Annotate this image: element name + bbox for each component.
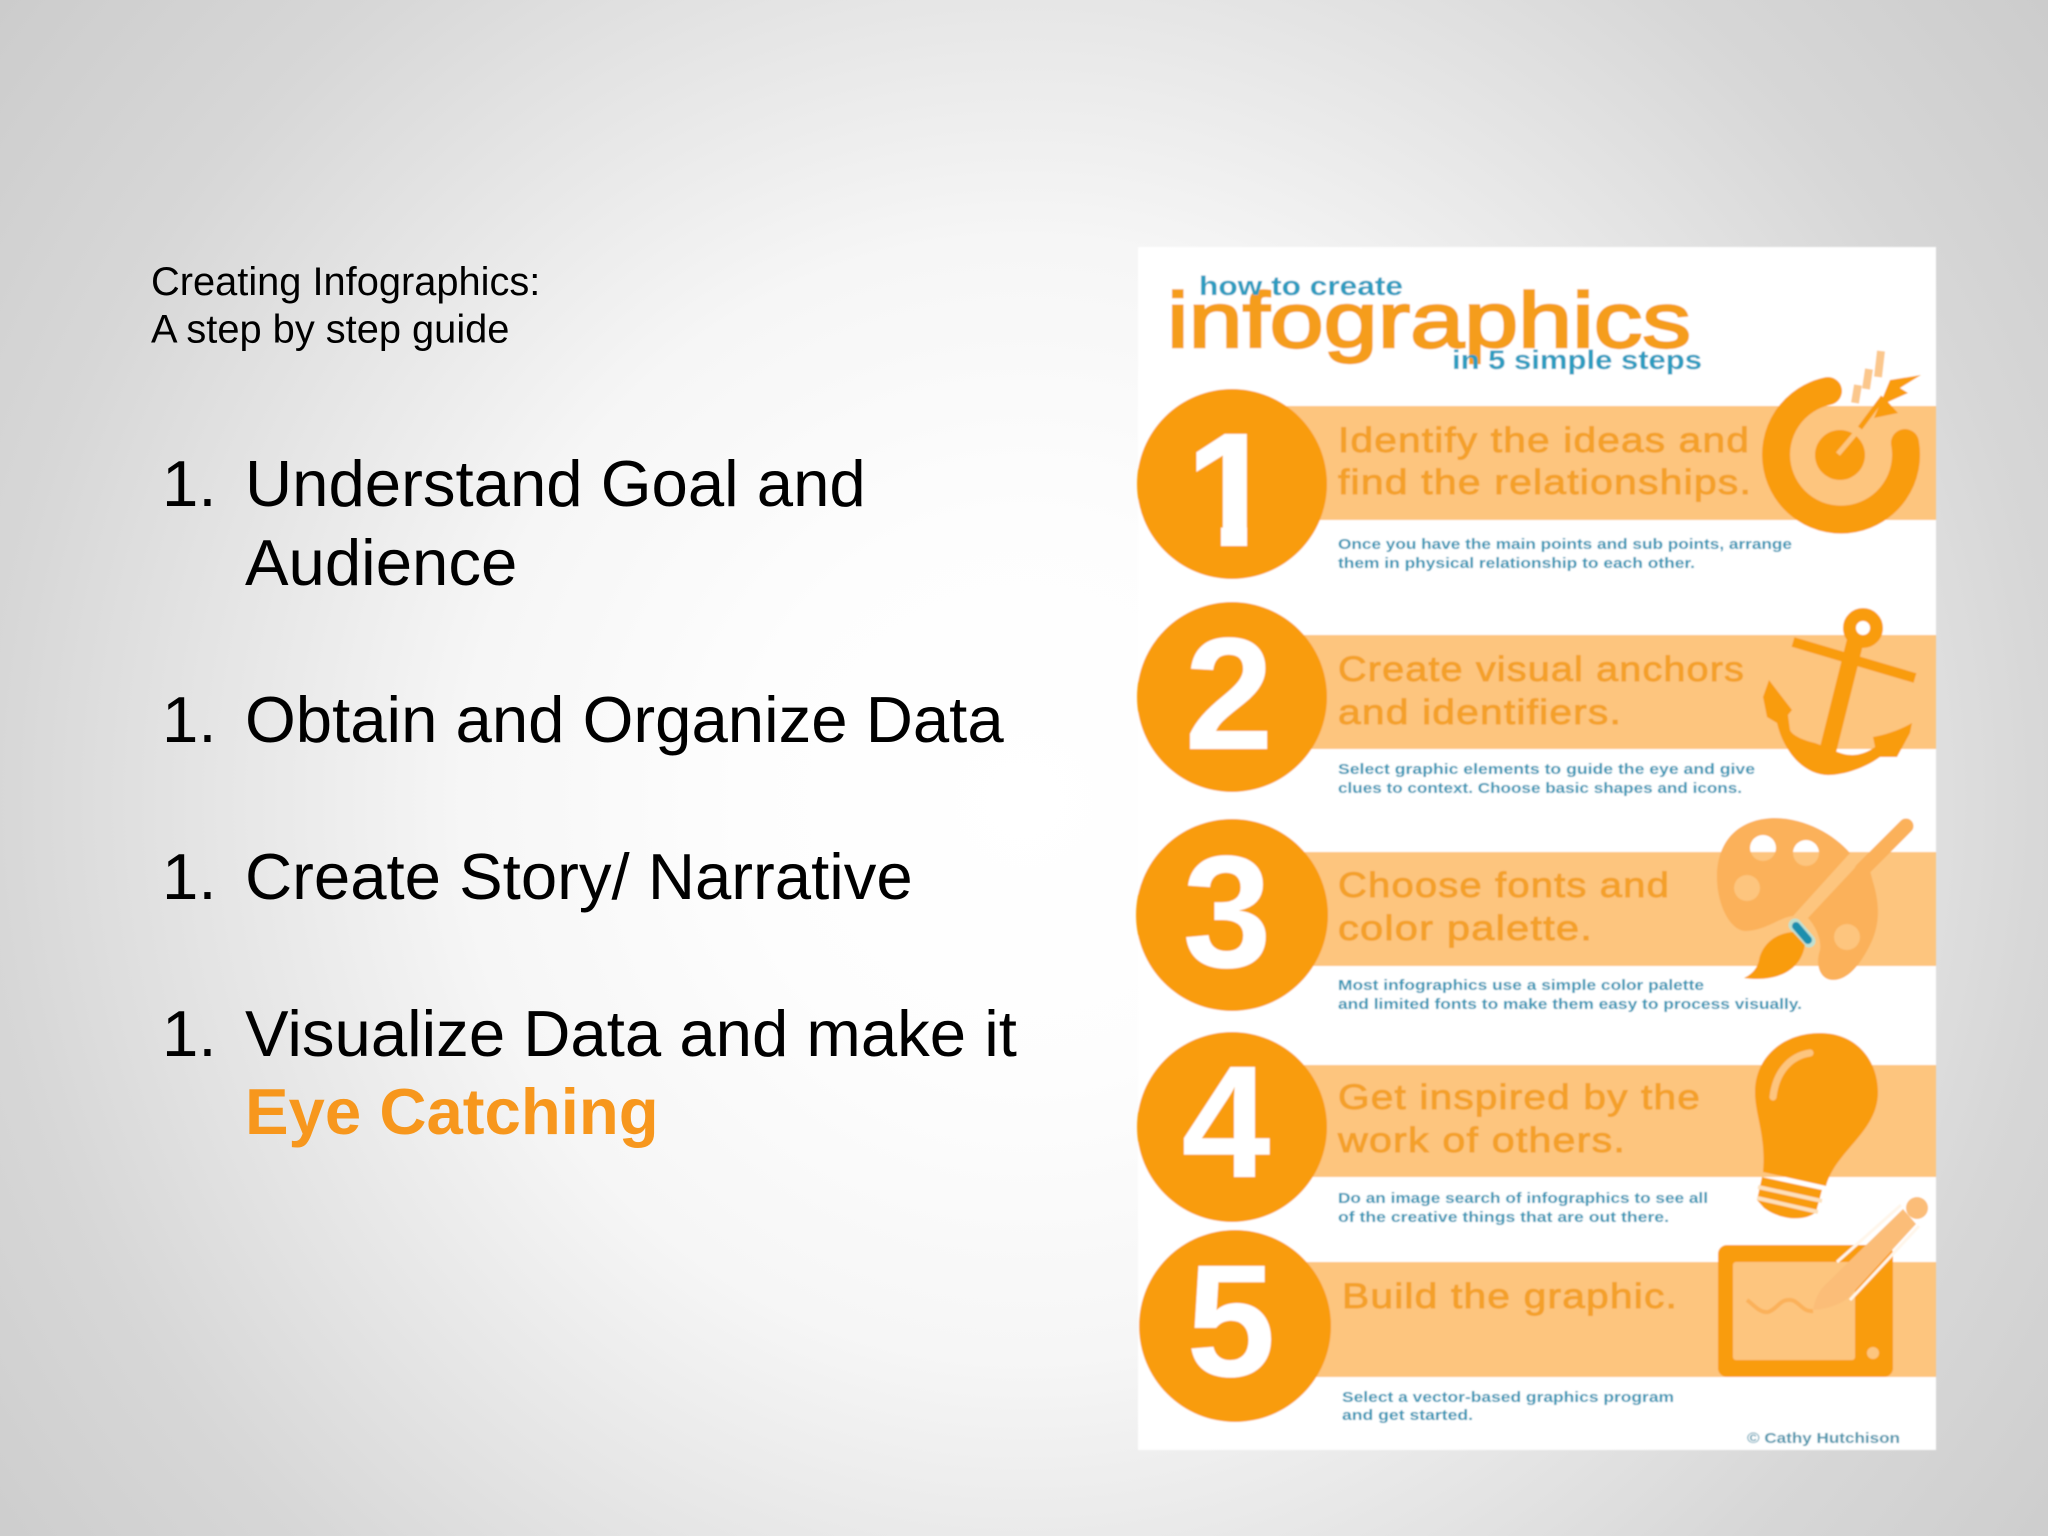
step: obtain and organize data: 1.: [162, 683, 216, 756]
icon: light bulb: [1755, 1033, 1878, 1218]
step 4: [1137, 1032, 1936, 1226]
step: understand goal and audience: Understand Goal and: [245, 447, 866, 520]
step 5: and get started.: [1342, 1407, 1473, 1424]
icon: palette and brush: [1717, 818, 1906, 980]
step 4: work of others.: [1337, 1121, 1626, 1160]
infographic heading: [1167, 271, 1702, 375]
step 3: Choose fonts and: [1338, 866, 1670, 905]
step: visualize data: Eye Catching: [245, 1075, 659, 1148]
step: understand goal and audience: [162, 447, 866, 599]
infographic heading: in 5 simple steps: [1452, 345, 1702, 375]
step 2: Create visual anchors: [1338, 650, 1745, 689]
icon: anchor: [1763, 614, 1915, 775]
step 2: and identifiers.: [1338, 693, 1622, 732]
title: [151, 260, 540, 352]
step: visualize data: 1.: [162, 997, 216, 1070]
credit: © Cathy Hutchison: [1747, 1430, 1900, 1447]
infographic heading: how to create: [1199, 271, 1403, 301]
step 3: color palette.: [1338, 909, 1593, 948]
step: create story: 1.: [162, 840, 216, 913]
step 5: Build the graphic.: [1342, 1277, 1678, 1316]
step 2: [1137, 602, 1936, 797]
step 2: Select graphic elements to guide the eye and give: [1338, 761, 1755, 778]
step 3: [1136, 818, 1936, 1013]
step 3: and limited fonts to make them easy to process visually.: [1338, 996, 1802, 1013]
step 5: [1139, 1197, 1936, 1424]
step 1: find the relationships.: [1338, 463, 1752, 502]
step 2: 2: [1185, 604, 1273, 783]
step: understand goal and audience: Audience: [245, 526, 517, 599]
step 4: Do an image search of infographics to see all: [1338, 1190, 1708, 1207]
step: understand goal and audience: 1.: [162, 447, 216, 520]
icon: target and arrow: [1776, 351, 1921, 520]
step 1: them in physical relationship to each other.: [1338, 555, 1695, 572]
infographic heading: infographics: [1167, 276, 1691, 364]
step: visualize data: Visualize Data and make it: [245, 997, 1017, 1070]
title: Creating Infographics:: [151, 260, 540, 304]
step 1: [1137, 351, 1936, 579]
step 5: Select a vector-based graphics program: [1342, 1389, 1674, 1406]
step 1: Identify the ideas and: [1338, 421, 1750, 460]
step 4: 4: [1182, 1032, 1271, 1211]
step 3: 3: [1183, 822, 1271, 1001]
numbered list: [162, 447, 1017, 1148]
infographic panel: [1136, 247, 1936, 1450]
step 1: 1: [1187, 400, 1275, 579]
step 5: 5: [1187, 1231, 1275, 1410]
icon: tablet and pencil: [1718, 1197, 1928, 1377]
step 4: Get inspired by the: [1338, 1078, 1701, 1117]
step 1: Once you have the main points and sub points, arrange: [1338, 536, 1792, 553]
step: create story: Create Story/ Narrative: [245, 840, 913, 913]
step 4: of the creative things that are out there.: [1338, 1209, 1669, 1226]
step 2: clues to context. Choose basic shapes and icons.: [1338, 780, 1742, 797]
step: obtain and organize data: Obtain and Organize Data: [245, 683, 1004, 756]
step: visualize data: [162, 997, 1017, 1148]
step 3: Most infographics use a simple color palette: [1338, 977, 1704, 994]
title: A step by step guide: [151, 308, 509, 352]
